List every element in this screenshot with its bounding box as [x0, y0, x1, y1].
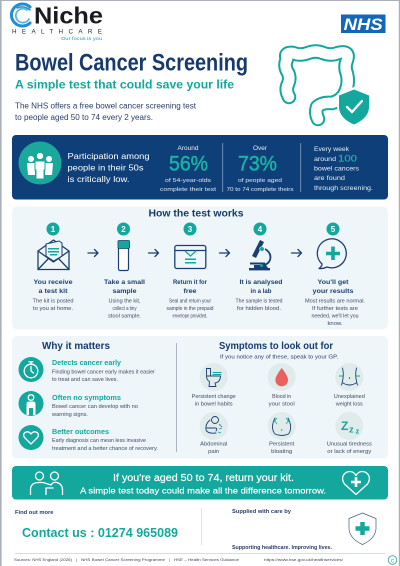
symptom: tiredness: [327, 412, 372, 455]
reason text: treatment and a better chance of recovery.: [52, 446, 158, 452]
step 1 title: [34, 279, 73, 295]
symptom label: Persistent: [269, 442, 295, 448]
reason text: [52, 369, 155, 383]
supplier block: [232, 509, 376, 551]
subtitle: A simple test that could save your life: [15, 78, 234, 92]
step 2 title: sample: [112, 288, 137, 295]
step 1 description: The kit is posted: [32, 298, 74, 304]
symptom label: pain: [208, 449, 219, 455]
icon: speech bubble with plus: [317, 239, 346, 269]
step 2 title: [104, 279, 145, 295]
symptom: bloating: [268, 412, 296, 455]
copyright mark: c: [391, 558, 394, 564]
banner subline: A simple test today could make all the difference tomorrow.: [80, 486, 326, 496]
step 5: 5: [331, 225, 336, 234]
stat: 56%: of 54-year-olds: [165, 178, 211, 184]
panel: participation statistics: [12, 135, 388, 200]
reason: better outcomes: [18, 425, 158, 452]
step 1 description: [32, 298, 74, 312]
supplier tagline: Supporting healthcare. Improving lives.: [232, 545, 332, 551]
step 3 description: envelope provided.: [172, 314, 208, 320]
sources footer: [14, 557, 344, 562]
step 2 description: [108, 298, 141, 320]
illustration: colon with shield: [286, 52, 371, 127]
icon: Zzz: Z: [341, 419, 348, 433]
arrow: [88, 250, 98, 256]
step 4 title: [240, 279, 282, 295]
panel: why it matters and symptoms: [12, 336, 388, 458]
symptom label: [192, 394, 236, 408]
icon: heart with plus: [343, 472, 369, 494]
icon: abdominal pain: [200, 412, 228, 440]
icon: sample tube: [118, 240, 130, 270]
title: Bowel Cancer Screening: [15, 50, 248, 76]
icon: return envelope: [175, 246, 206, 268]
step 1 description: to you at home.: [33, 306, 73, 312]
logo: Niche Healthcare: [11, 2, 103, 42]
participation message: [68, 151, 150, 184]
reason text: Finding bowel cancer early makes it easier: [52, 369, 155, 375]
icon: logo swirl: [11, 4, 30, 26]
reason heading: Better outcomes: [52, 429, 109, 436]
icon: microscope: [249, 240, 270, 270]
step 4 title: in a lab: [250, 288, 272, 295]
icon: shield with plus: [349, 513, 376, 544]
symptom label: [269, 394, 295, 408]
stat: 73%: 73%: [238, 152, 277, 176]
step 2: 2: [121, 225, 126, 234]
sources footer: Sources: NHS England (2026): [14, 557, 73, 562]
reason text: to treat and can save lives.: [52, 377, 118, 383]
reason: often no symptoms: [18, 391, 138, 418]
icon: waist: [335, 363, 363, 391]
reason text: Bowel cancer can develop with no: [52, 404, 138, 410]
step 2 description: stool sample.: [108, 314, 141, 320]
icon: bloated abdomen: [268, 412, 296, 440]
step 2 description: Using the kit,: [108, 298, 140, 304]
contact phone number: Contact us : 01274 965089: [22, 526, 178, 540]
icon: toilet: [200, 363, 228, 391]
participation message: Participation among: [68, 151, 150, 161]
stat: 73%: 70 to 74 complete theirs: [226, 187, 294, 193]
step 5 description: Most results are normal.: [305, 298, 365, 304]
step 5 description: If further tests are: [312, 306, 358, 312]
reason heading: Detects cancer early: [52, 360, 121, 367]
stat: 100 cancers weekly: through screening.: [314, 186, 373, 192]
step 5 description: [305, 298, 365, 327]
stat: 73%: Over: [253, 145, 268, 152]
symptom: weight loss: [334, 363, 365, 408]
step 5 title: [312, 279, 354, 295]
step 3 description: sample in the prepaid: [166, 306, 214, 312]
symptom label: [269, 442, 295, 455]
intro text: [15, 102, 197, 122]
icon: Zzz: z: [349, 424, 354, 436]
copyright mark: [388, 556, 397, 564]
reason text: Early diagnosis can mean less invasive: [52, 438, 146, 444]
step 5 description: know.: [328, 321, 342, 327]
logo tagline: Our focus is you: [61, 36, 102, 42]
step 4 description: [236, 298, 283, 312]
logo descriptor: HEALTHCARE: [12, 28, 102, 36]
icon: heart: [18, 425, 44, 450]
icon: shield check: [337, 87, 371, 127]
step 2 description: collect a tiny: [112, 306, 137, 312]
symptom label: Unusual tiredness: [327, 442, 372, 448]
icon: Zzz: z: [356, 426, 360, 436]
symptoms intro: If you notice any of these, speak to your GP.: [220, 354, 338, 360]
NHS logo: NHS: [344, 15, 383, 34]
arrow: [292, 250, 302, 256]
icon: stopwatch: [18, 357, 44, 382]
stat: 73%: of people aged: [238, 178, 282, 184]
stat: 100 cancers weekly: [314, 147, 373, 192]
arrow: [148, 250, 158, 256]
step 3 description: [166, 298, 214, 320]
step 3: [166, 222, 214, 320]
symptom: abdominal pain: [200, 412, 228, 455]
step 1: 1: [51, 225, 56, 234]
sources footer: |: [169, 557, 170, 562]
step 4 title: It is analysed: [240, 279, 282, 286]
reason text: [51, 404, 138, 418]
icon: envelope: [38, 240, 69, 270]
stat: 100 cancers weekly: are found: [314, 176, 345, 182]
icon: Zzz: [335, 412, 363, 440]
symptom label: Abdominal: [200, 442, 227, 448]
step 5 title: your results: [312, 288, 354, 295]
symptom label: Unexplained: [334, 394, 365, 400]
participation message: people in their 50s: [68, 162, 144, 172]
banner headline: If you're aged 50 to 74, return your kit.: [113, 473, 294, 484]
sources footer: HSE – Health Services Guidance: [174, 557, 239, 562]
stat: 73%: [226, 145, 294, 193]
logo wordmark: Niche: [34, 2, 103, 28]
participation message: is critically low.: [68, 174, 130, 184]
symptom label: or lack of energy: [327, 449, 372, 455]
step 1: [32, 222, 74, 312]
symptom label: [200, 442, 227, 455]
intro text: The NHS offers a free bowel cancer screening test: [15, 102, 197, 110]
step 4 description: for hidden blood.: [237, 306, 281, 312]
symptom label: your stool: [269, 402, 295, 408]
arrow: [220, 250, 230, 256]
sources footer: https://www.hse.gov.uk/healthservices/: [264, 557, 344, 562]
symptom label: bloating: [271, 449, 292, 455]
label: find out more: Find out more: [15, 510, 54, 516]
step 1 title: a test kit: [38, 288, 68, 295]
symptom label: Blood in: [272, 394, 291, 400]
step 3 title: [173, 279, 207, 295]
symptom: blood in stool: [268, 363, 296, 408]
step 3 title: Return it for: [173, 279, 207, 286]
stat: 100 cancers weekly: 100: [338, 154, 357, 164]
symptom: bowel habits: [192, 363, 236, 408]
stat: 56%: complete their test: [160, 187, 217, 193]
step 4: 4: [258, 225, 263, 234]
symptom label: Persistent change: [192, 394, 236, 400]
banner: call to action: [12, 466, 388, 500]
reason text: warning signs.: [51, 412, 88, 418]
icon: person: [18, 391, 44, 416]
icon: two people: [30, 472, 62, 494]
step 1 title: You receive: [34, 279, 73, 286]
stat: 100 cancers weekly: bowel cancers: [314, 166, 359, 172]
step 5: [305, 222, 365, 327]
step 4: [236, 222, 283, 312]
reason: detects cancer early: [18, 357, 155, 383]
symptom label: in bowel habits: [195, 402, 233, 408]
reason heading: Often no symptoms: [52, 395, 121, 402]
symptom label: [327, 442, 372, 455]
step 3 description: Seal and return your: [169, 298, 211, 304]
stat: 56%: [160, 145, 217, 193]
step 3: 3: [188, 225, 193, 234]
stat: 56%: Around: [178, 145, 199, 152]
step 2 title: Take a small: [104, 279, 145, 286]
intro text: to people aged 50 to 74 every 2 years.: [15, 113, 153, 122]
reason text: [52, 438, 158, 452]
panel: how the test works: [12, 206, 388, 330]
heading: how the test works: How the test works: [148, 208, 244, 220]
step 5 title: You'll get: [318, 279, 349, 286]
heading: why it matters: Why it matters: [42, 340, 110, 352]
stat: 100 cancers weekly: around: [314, 157, 336, 163]
contact block: [15, 510, 178, 540]
step 5 description: needed, we'll let you: [312, 314, 359, 320]
icon: group of people: [18, 142, 62, 184]
step 2: [104, 222, 145, 320]
label: supplied with care by: Supplied with care by: [232, 509, 291, 515]
step 3 title: free: [184, 288, 197, 295]
stat: 56%: 56%: [169, 152, 208, 176]
sources footer: NHS Bowel Cancer Screening Programme: [81, 557, 165, 562]
icon: blood drop: [268, 363, 296, 391]
step 4 description: The sample is tested: [236, 298, 283, 304]
heading: symptoms: Symptoms to look out for: [219, 340, 333, 352]
symptom label: weight loss: [336, 402, 363, 408]
symptom label: [334, 394, 365, 408]
stat: 100 cancers weekly: Every week: [314, 147, 350, 153]
sources footer: |: [76, 557, 77, 562]
